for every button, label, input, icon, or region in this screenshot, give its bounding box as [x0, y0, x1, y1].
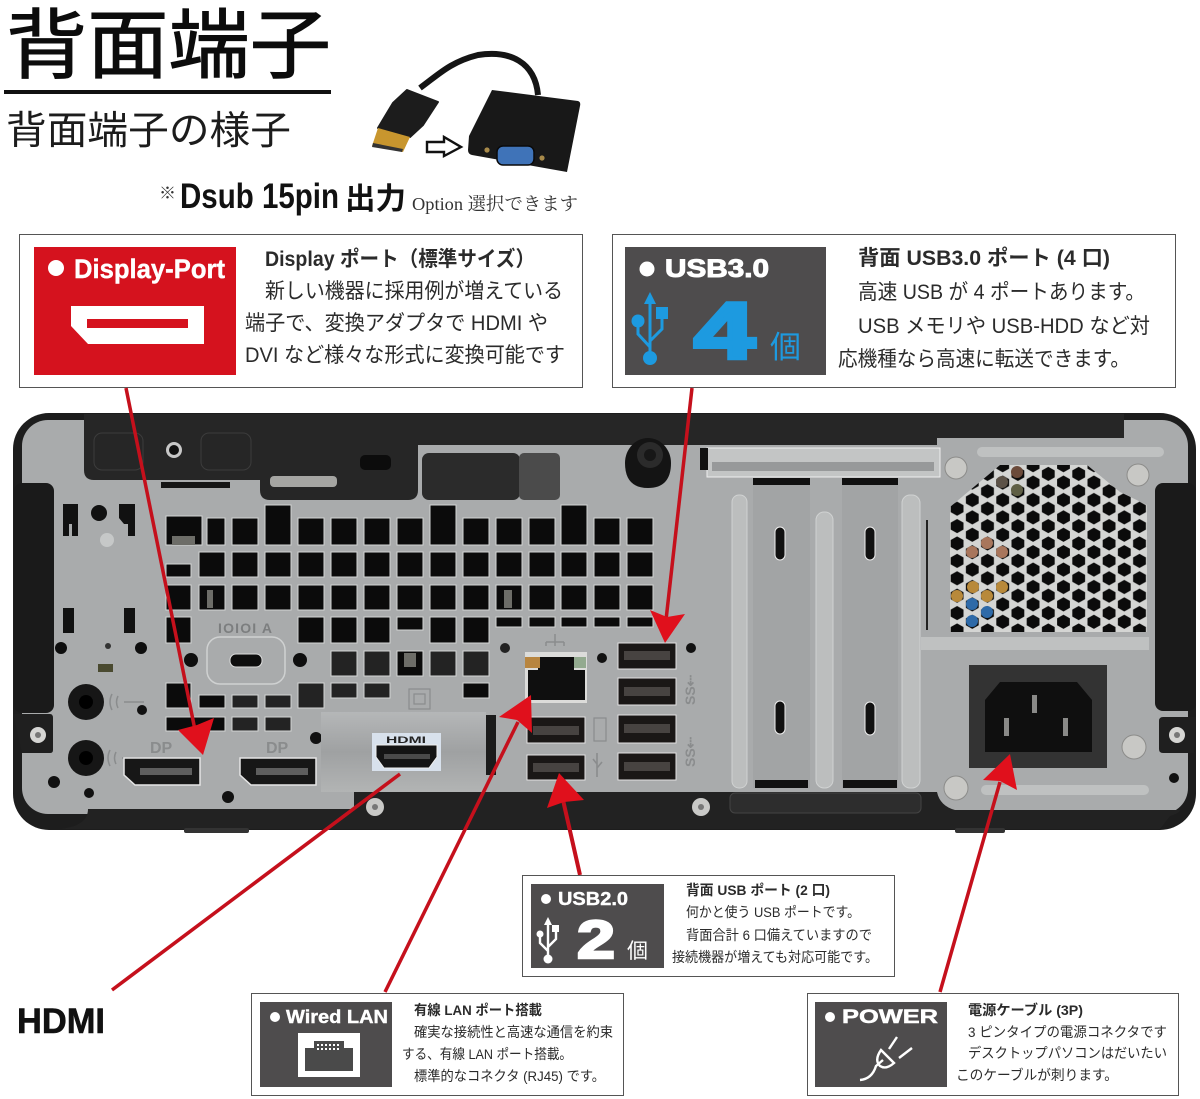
- panel: POWER: [808, 994, 1178, 1096]
- title underline: [4, 90, 331, 94]
- text: USB 3.0 description: USB メモリや USB-HDD など対: [858, 315, 1150, 338]
- note: Dsub 15pin output option: 出力: [345, 183, 406, 216]
- PSU inner parts seen through grille: [951, 466, 1023, 627]
- expansion slots: [700, 448, 940, 788]
- title: 背面端子: [6, 4, 331, 89]
- LAN port: [525, 634, 587, 703]
- HDMI patch: HDMI: [386, 735, 426, 745]
- badge: USB 3.0: 個: [770, 330, 801, 365]
- note: Dsub 15pin output option: Option 選択できます: [412, 194, 578, 214]
- badge: Wired LAN: Wired LAN: [286, 1007, 388, 1027]
- text: POWER description: このケーブルが刺ります。: [956, 1067, 1118, 1083]
- arrow: to DisplayPort: [126, 388, 214, 755]
- arrow: adapter direction: [427, 137, 461, 156]
- badge: USB 2.0: 2: [577, 910, 615, 970]
- USB 2.0 ports: [527, 717, 606, 780]
- panel: DisplayPort: [20, 234, 582, 388]
- text: Wired LAN description: [402, 1002, 613, 1084]
- text: USB 2.0 description: 接続機器が増えても対応可能です。: [672, 949, 878, 965]
- power socket: [969, 665, 1107, 768]
- audio jacks: [68, 684, 104, 776]
- arrow: to USB 3.0 ports: [650, 388, 692, 643]
- text: USB 3.0 description: 高速 USB が 4 ポートあります。: [858, 281, 1145, 304]
- text: POWER description: 電源ケーブル (3P): [968, 1002, 1083, 1018]
- text: DisplayPort description: Display ポート（標準サイズ）: [265, 247, 535, 271]
- arrow: HDMI leader line: [112, 774, 400, 990]
- USB 3.0 ports: [618, 643, 698, 780]
- text: POWER description: デスクトップパソコンはだいたい: [968, 1045, 1167, 1061]
- subtitle: 背面端子の様子: [6, 110, 291, 153]
- badge: USB 2.0: 個: [627, 940, 648, 963]
- badge: DisplayPort: Display-Port: [74, 254, 225, 284]
- screws: [944, 457, 1149, 800]
- vent holes: inner dark grey: [232, 651, 489, 731]
- icon: USB: [632, 292, 668, 365]
- text: USB 2.0 description: [672, 882, 878, 965]
- text: USB 3.0 description: 応機種なら高速に転送できます。: [838, 348, 1130, 371]
- label: HDMI: HDMI: [17, 1002, 105, 1041]
- PC rear photo: IOIOI A: [218, 620, 272, 636]
- vent inner parts: [172, 536, 512, 667]
- text: USB 2.0 description: 背面合計 6 口備えていますので: [686, 927, 872, 943]
- DisplayPort connectors: DP: [266, 740, 289, 757]
- HDMI patch: [321, 712, 496, 792]
- badge: USB 2.0: [531, 884, 664, 970]
- audio port marks: [108, 694, 144, 766]
- text: POWER description: [956, 1002, 1167, 1083]
- PC rear photo: [13, 413, 1196, 833]
- panel: Wired LAN: [252, 994, 624, 1096]
- icon: USB: [536, 917, 559, 964]
- text: USB 3.0 description: [838, 247, 1150, 371]
- arrow: to LAN port: [385, 695, 532, 992]
- arrow: to USB 2.0 ports: [547, 773, 584, 875]
- icon: plug: [860, 1037, 912, 1080]
- badge: USB 3.0: [625, 247, 826, 375]
- arrow: to power socket: [940, 754, 1017, 992]
- note: Dsub 15pin output option: Dsub 15pin: [180, 177, 339, 216]
- panel: USB 2.0: [522, 876, 894, 976]
- text: DisplayPort description: DVI など様々な形式に変換可能です: [245, 344, 565, 367]
- text: Wired LAN description: 有線 LAN ポート搭載: [414, 1002, 542, 1018]
- USB 3.0 ports: SS⇠: [682, 674, 698, 705]
- PSU vent grille: [950, 465, 1147, 632]
- badge: DisplayPort: [34, 247, 236, 375]
- text: DisplayPort description: 端子で、変換アダプタで HDMI や: [245, 312, 548, 335]
- badge: POWER: [815, 1002, 947, 1087]
- text: USB 3.0 description: 背面 USB3.0 ポート (4 口): [858, 247, 1110, 270]
- DisplayPort connectors: [124, 740, 316, 785]
- vent holes: [166, 505, 653, 731]
- badge: USB 3.0: 4: [694, 286, 756, 375]
- text: USB 2.0 description: 何かと使う USB ポートです。: [686, 904, 860, 920]
- badge: USB 2.0: USB2.0: [558, 889, 628, 909]
- icon: LAN socket: [298, 1033, 360, 1077]
- text: Wired LAN description: 確実な接続性と高速な通信を約束: [414, 1024, 613, 1040]
- USB 3.0 ports: SS⇠: [682, 736, 698, 767]
- text: USB 2.0 description: 背面 USB ポート (2 口): [686, 882, 830, 898]
- text: Wired LAN description: する、有線 LAN ポート搭載。: [402, 1046, 572, 1062]
- DisplayPort connectors: DP: [150, 740, 173, 757]
- badge: Wired LAN: [260, 1002, 392, 1087]
- mount holes and small cut-outs: [63, 504, 135, 633]
- text: POWER description: 3 ピンタイプの電源コネクタです: [968, 1024, 1167, 1040]
- badge: USB 3.0: USB3.0: [665, 255, 769, 283]
- note: Dsub 15pin output option: ※: [159, 184, 176, 203]
- text: DisplayPort description: [245, 247, 565, 367]
- badge: POWER: POWER: [842, 1007, 938, 1028]
- adapter photo: DisplayPort to VGA: [372, 54, 580, 172]
- text: DisplayPort description: 新しい機器に採用例が増えている: [265, 280, 563, 303]
- text: Wired LAN description: 標準的なコネクタ (RJ45) です。: [414, 1068, 605, 1084]
- panel: USB 3.0: [612, 234, 1176, 388]
- note: Dsub 15pin output option: [159, 177, 578, 216]
